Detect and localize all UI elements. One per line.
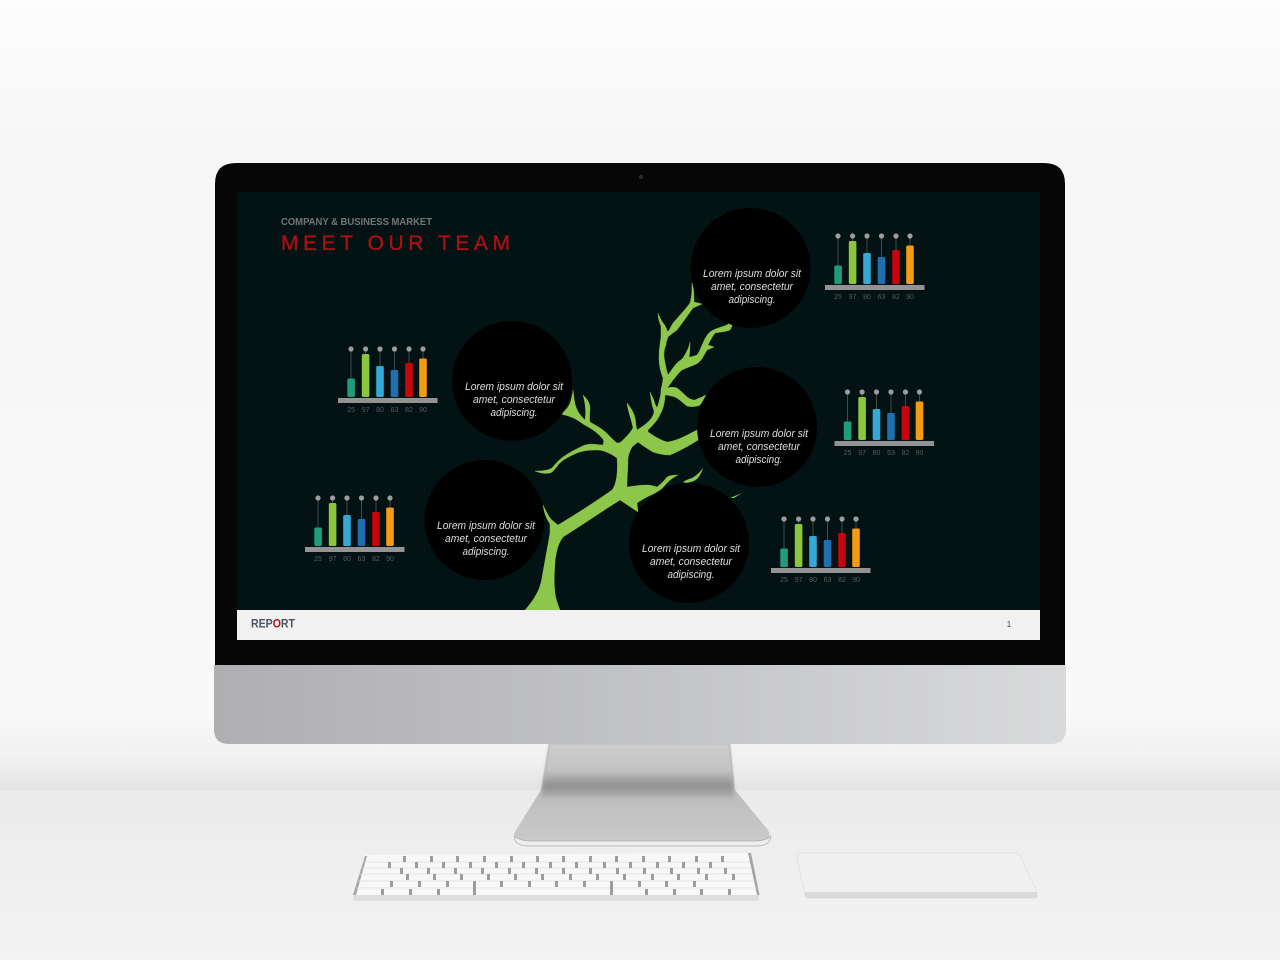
circle: top bbox=[690, 208, 810, 328]
bar chart: bottom right: 25 bbox=[780, 577, 788, 584]
bar chart: right middle: 97 bbox=[858, 450, 866, 457]
keyboard body bbox=[353, 853, 759, 901]
bar chart: left upper: 63 bbox=[391, 407, 398, 414]
bar chart: top right: 97 bbox=[849, 294, 857, 301]
circle: right middle: Lorem ipsum dolor sit bbox=[710, 428, 809, 440]
tree sliver bbox=[730, 493, 742, 498]
bar chart: right middle: 25 bbox=[844, 450, 851, 457]
bar chart: left lower: 80 bbox=[343, 556, 351, 563]
circle: top: adipiscing. bbox=[728, 294, 776, 306]
bar chart: left upper: 25 bbox=[347, 407, 355, 414]
bar chart: right middle: 82 bbox=[902, 450, 909, 457]
bar chart: left lower bbox=[305, 495, 404, 563]
bar chart: left lower: 97 bbox=[329, 556, 337, 563]
bar chart: left lower: 25 bbox=[314, 556, 322, 563]
monitor stand bbox=[514, 743, 771, 846]
circle: left lower: amet, consectetur bbox=[445, 533, 528, 545]
circle: left upper: amet, consectetur bbox=[473, 394, 556, 406]
slide footer: REPORT bbox=[251, 618, 295, 630]
bar chart: right middle: 63 bbox=[887, 450, 895, 457]
circle: right middle: adipiscing. bbox=[736, 454, 782, 466]
bar chart: left upper: 82 bbox=[405, 407, 413, 414]
bar chart: left lower: 90 bbox=[386, 556, 394, 563]
bar chart: left lower: 63 bbox=[358, 556, 365, 563]
bar chart: left upper bbox=[338, 346, 438, 414]
circle: left upper: Lorem ipsum dolor sit bbox=[465, 381, 564, 393]
bar chart: top right: 80 bbox=[863, 294, 871, 301]
circle: right middle: amet, consectetur bbox=[718, 441, 801, 453]
bar chart: top right: 63 bbox=[878, 294, 885, 301]
monitor bezel bbox=[215, 163, 1065, 665]
circle: left lower: Lorem ipsum dolor sit bbox=[437, 520, 536, 532]
bar chart: top right: 25 bbox=[834, 294, 842, 301]
bar chart: left upper: 90 bbox=[419, 407, 427, 414]
bar chart: bottom right: 97 bbox=[795, 577, 803, 584]
bar chart: bottom right: 90 bbox=[852, 577, 860, 584]
circle: bottom: amet, consectetur bbox=[650, 556, 733, 568]
tree floating twig bbox=[683, 468, 703, 483]
bar chart: right middle bbox=[834, 389, 934, 457]
key gaps bbox=[356, 856, 757, 895]
monitor chin bbox=[214, 665, 1066, 744]
bar chart: left upper: 97 bbox=[362, 407, 370, 414]
circle: left upper bbox=[452, 321, 572, 441]
circle: bottom: Lorem ipsum dolor sit bbox=[642, 543, 741, 555]
bar chart: bottom right: 63 bbox=[824, 577, 831, 584]
bar chart: bottom right bbox=[771, 516, 870, 584]
slide footer: 1 bbox=[1007, 620, 1012, 629]
bar chart: top right: 90 bbox=[906, 294, 914, 301]
circle: left lower: adipiscing. bbox=[462, 546, 510, 558]
bar chart: top right: 82 bbox=[892, 294, 900, 301]
bar chart: bottom right: 80 bbox=[809, 577, 817, 584]
keyboard bbox=[353, 853, 760, 901]
tree illustration bbox=[525, 283, 734, 610]
circle: left lower bbox=[424, 460, 544, 580]
desk surface bbox=[0, 790, 1280, 960]
circle: right middle bbox=[697, 367, 817, 487]
bar chart: right middle: 80 bbox=[873, 450, 880, 457]
circle: bottom: adipiscing. bbox=[668, 569, 714, 581]
circle: top: amet, consectetur bbox=[711, 281, 794, 293]
slide footer bbox=[237, 610, 1040, 640]
trackpad bbox=[797, 853, 1037, 898]
bar chart: top right bbox=[825, 233, 924, 301]
slide screen bbox=[237, 192, 1040, 640]
webcam bbox=[639, 175, 643, 179]
circle: top: Lorem ipsum dolor sit bbox=[703, 268, 802, 280]
circle: bottom bbox=[629, 483, 749, 603]
bar chart: bottom right: 82 bbox=[838, 577, 846, 584]
bar chart: left lower: 82 bbox=[372, 556, 380, 563]
bar chart: right middle: 90 bbox=[916, 450, 923, 457]
screen background bbox=[237, 192, 1040, 610]
circle: left upper: adipiscing. bbox=[490, 407, 538, 419]
slide title: MEET OUR TEAM bbox=[281, 232, 510, 255]
slide subtitle: COMPANY & BUSINESS MARKET bbox=[281, 217, 432, 228]
monitor bbox=[214, 163, 1066, 846]
bar chart: left upper: 80 bbox=[376, 407, 384, 414]
